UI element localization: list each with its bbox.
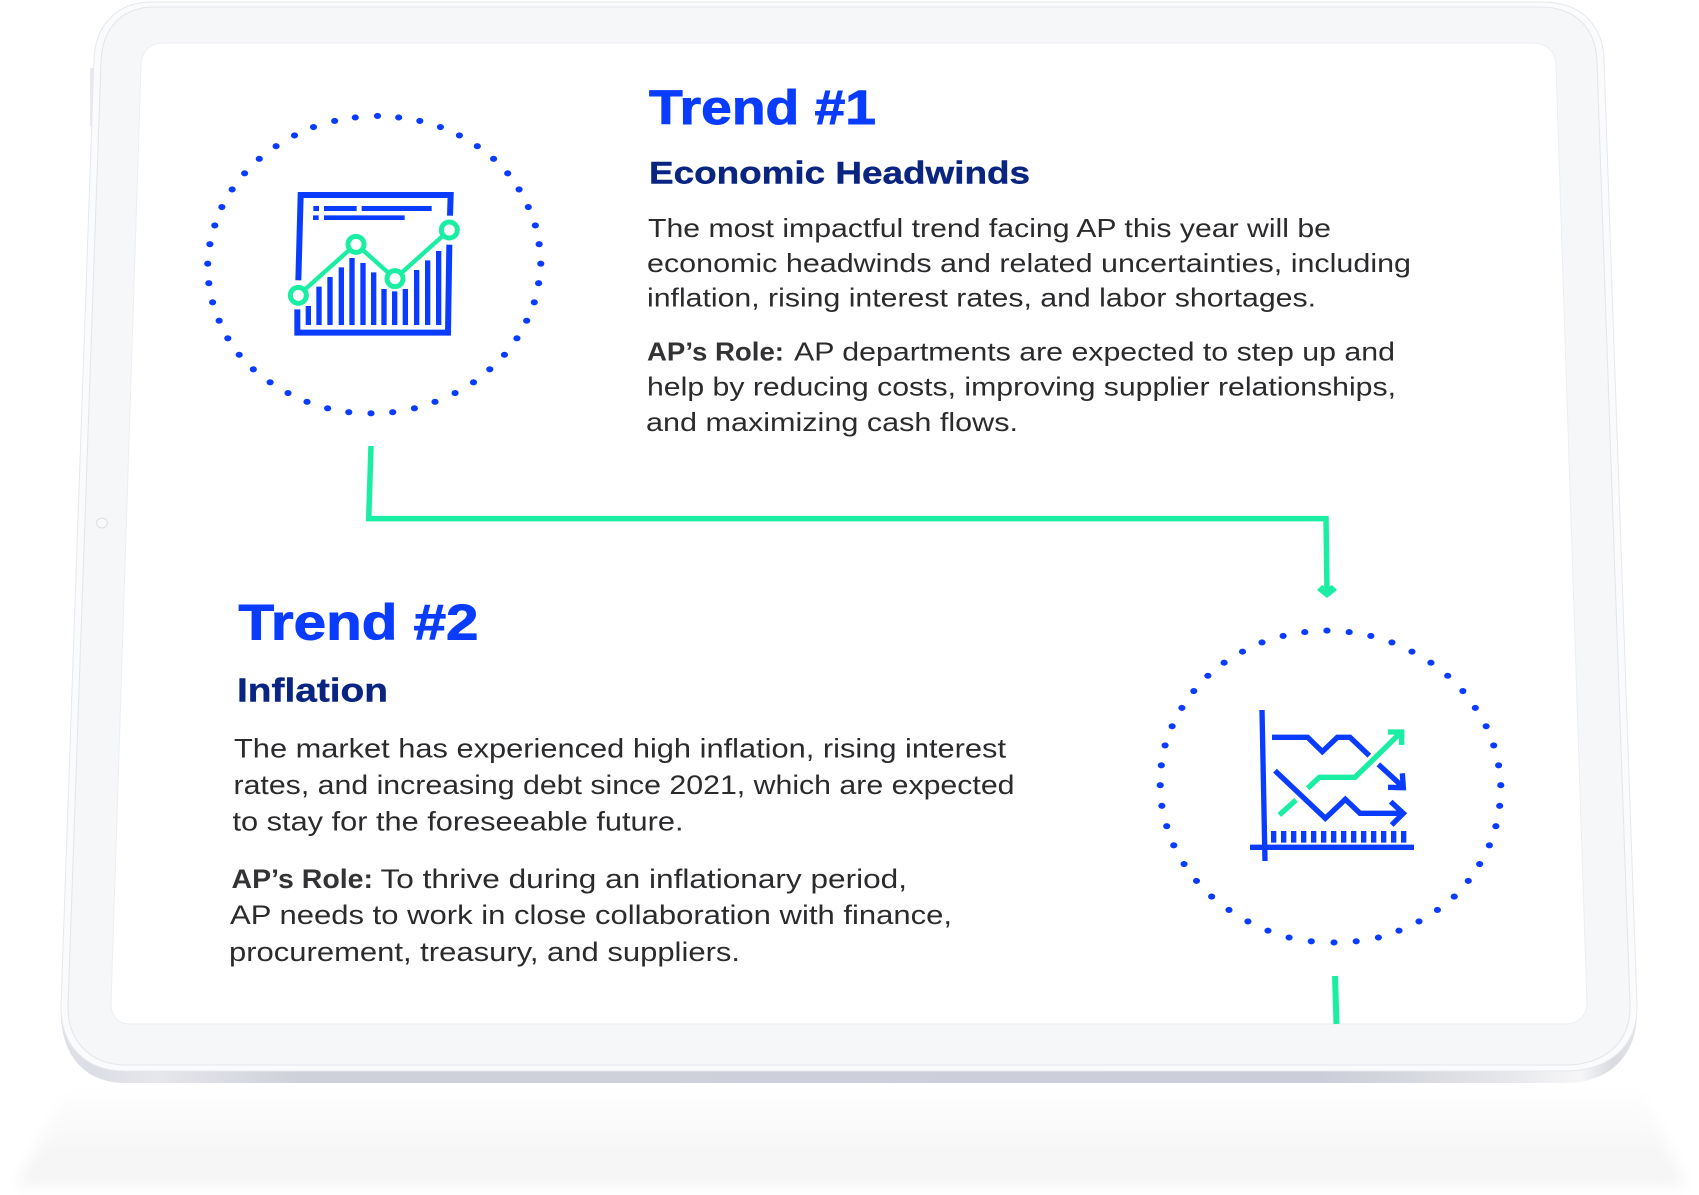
paragraph: AP's role: AP’s Role: xyxy=(232,864,373,894)
paragraph: AP's role: AP departments are expected to step up and xyxy=(794,336,1395,366)
paragraph: AP's role xyxy=(646,336,1396,437)
bars xyxy=(308,251,439,325)
paragraph: trend description: to stay for the foreseeable future. xyxy=(232,806,684,836)
icon: inflation line chart with arrows xyxy=(1250,710,1414,861)
green trend line xyxy=(290,222,457,303)
paragraph: trend description: The most impactful trend facing AP this year will be xyxy=(648,213,1331,243)
dotted circle: trend 2 xyxy=(1157,628,1504,946)
paragraph: AP's role: AP needs to work in close collaboration with finance, xyxy=(230,900,952,930)
subheading: economic headwinds: Economic Headwinds xyxy=(649,154,1030,190)
paragraph: AP's role: and maximizing cash flows. xyxy=(646,407,1018,437)
axes xyxy=(1250,710,1414,861)
connector arrow: trend 1 to trend 2 xyxy=(369,446,1337,598)
paragraph: AP's role: procurement, treasury, and suppliers. xyxy=(229,937,740,967)
subheading: inflation: Inflation xyxy=(237,672,388,708)
dotted circle: trend 1 xyxy=(204,113,544,416)
paragraph: trend description: inflation, rising interest rates, and labor shortages. xyxy=(647,282,1316,312)
falling line with arrow xyxy=(1272,737,1403,788)
paragraph: trend description: The market has experienced high inflation, rising interest xyxy=(234,734,1007,764)
flattening line with arrow xyxy=(1275,771,1403,825)
paragraph: trend description: rates, and increasing debt since 2021, which are expected xyxy=(234,770,1015,800)
trend 2 text xyxy=(229,594,1015,967)
rising green line with arrow xyxy=(1279,732,1402,815)
icon: report with line and bar chart xyxy=(290,195,457,333)
paragraph: AP's role: To thrive during an inflationary period, xyxy=(380,864,907,894)
paragraph: trend description xyxy=(647,213,1411,312)
camera dot xyxy=(96,518,108,528)
report frame xyxy=(297,195,451,333)
heading: trend 2: Trend #2 xyxy=(238,594,478,650)
paragraph: AP's role: AP’s Role: xyxy=(647,336,784,366)
tablet drop shadow xyxy=(16,1085,1686,1186)
heading: trend 1: Trend #1 xyxy=(649,82,876,135)
power button xyxy=(90,68,94,127)
axis ticks xyxy=(1274,831,1404,843)
paragraph: AP's role: help by reducing costs, improving supplier relationships, xyxy=(647,372,1396,402)
paragraph: trend description xyxy=(232,734,1015,836)
paragraph: AP's role xyxy=(229,864,952,967)
paragraph: trend description: economic headwinds and related uncertainties, including xyxy=(647,248,1411,278)
tablet screen xyxy=(111,43,1587,1024)
connector line leaving trend 2 xyxy=(1335,976,1336,1024)
trend 1 text xyxy=(646,82,1411,437)
report text bars xyxy=(313,206,432,220)
